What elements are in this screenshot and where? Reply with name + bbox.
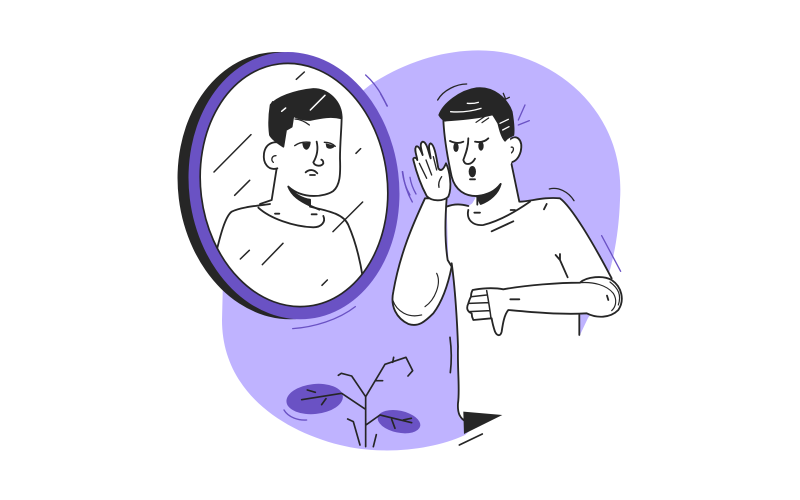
- shoulder motion line: [549, 188, 574, 201]
- plant leaves: [285, 381, 422, 437]
- plant twigs: [307, 357, 411, 428]
- background blob: [222, 50, 620, 450]
- arm marks: [510, 296, 608, 300]
- reflection shirt: [216, 204, 363, 277]
- reflection nose: [313, 142, 323, 166]
- trouser shadow: [463, 412, 502, 434]
- raised hand: [413, 142, 450, 200]
- mirror glass: [186, 53, 401, 317]
- mirror: [178, 52, 411, 330]
- reflection forehead wrinkle: [295, 119, 309, 125]
- ground stroke: [459, 434, 482, 445]
- hair: [439, 88, 514, 141]
- neck: [468, 160, 519, 213]
- illustration: man gesturing at his sad reflection: [178, 50, 623, 450]
- face: [443, 113, 512, 196]
- reflection neck: [260, 168, 319, 210]
- head purple motion lines: [518, 105, 529, 125]
- brows: [450, 138, 488, 143]
- eyes: [453, 143, 459, 152]
- man: [392, 160, 612, 428]
- neck shadow: [477, 184, 501, 204]
- plant stems: [302, 357, 413, 447]
- raised arm: [392, 198, 452, 325]
- mirror motion lines: [293, 75, 410, 329]
- torso outline: [447, 198, 612, 422]
- mouth: [469, 166, 476, 177]
- reflection ear: [264, 142, 284, 169]
- reflection hair: [269, 89, 342, 147]
- reflection mouth: [306, 170, 317, 175]
- chest and hem lines: [492, 204, 579, 335]
- lower body details: [284, 337, 502, 447]
- body motion line: [450, 337, 451, 373]
- finger lines: [419, 157, 442, 187]
- leaf motion line: [284, 410, 307, 420]
- nose: [463, 138, 475, 164]
- motion lines around man: [381, 94, 621, 271]
- reflection head: [260, 89, 342, 210]
- hair highlights: [451, 102, 509, 130]
- man head: [413, 84, 529, 204]
- torso: [447, 198, 612, 428]
- head motion line: [438, 84, 467, 100]
- forehead wrinkles: [476, 116, 489, 123]
- purple motion lines: [381, 94, 621, 271]
- ear: [509, 137, 521, 162]
- mirror shadow rim: [162, 40, 406, 332]
- mirror purple frame: [173, 40, 415, 331]
- hair tuft: [503, 93, 509, 99]
- mirror glass scratches: [214, 72, 363, 285]
- reflection face: [280, 115, 342, 196]
- collar: [468, 202, 530, 225]
- reflection neck shadow: [288, 187, 310, 206]
- reflection brows and eyes: [295, 142, 335, 146]
- forearm with thumbs-down hand: [467, 277, 622, 335]
- sleeve folds: [580, 282, 620, 311]
- fist finger lines: [469, 291, 491, 318]
